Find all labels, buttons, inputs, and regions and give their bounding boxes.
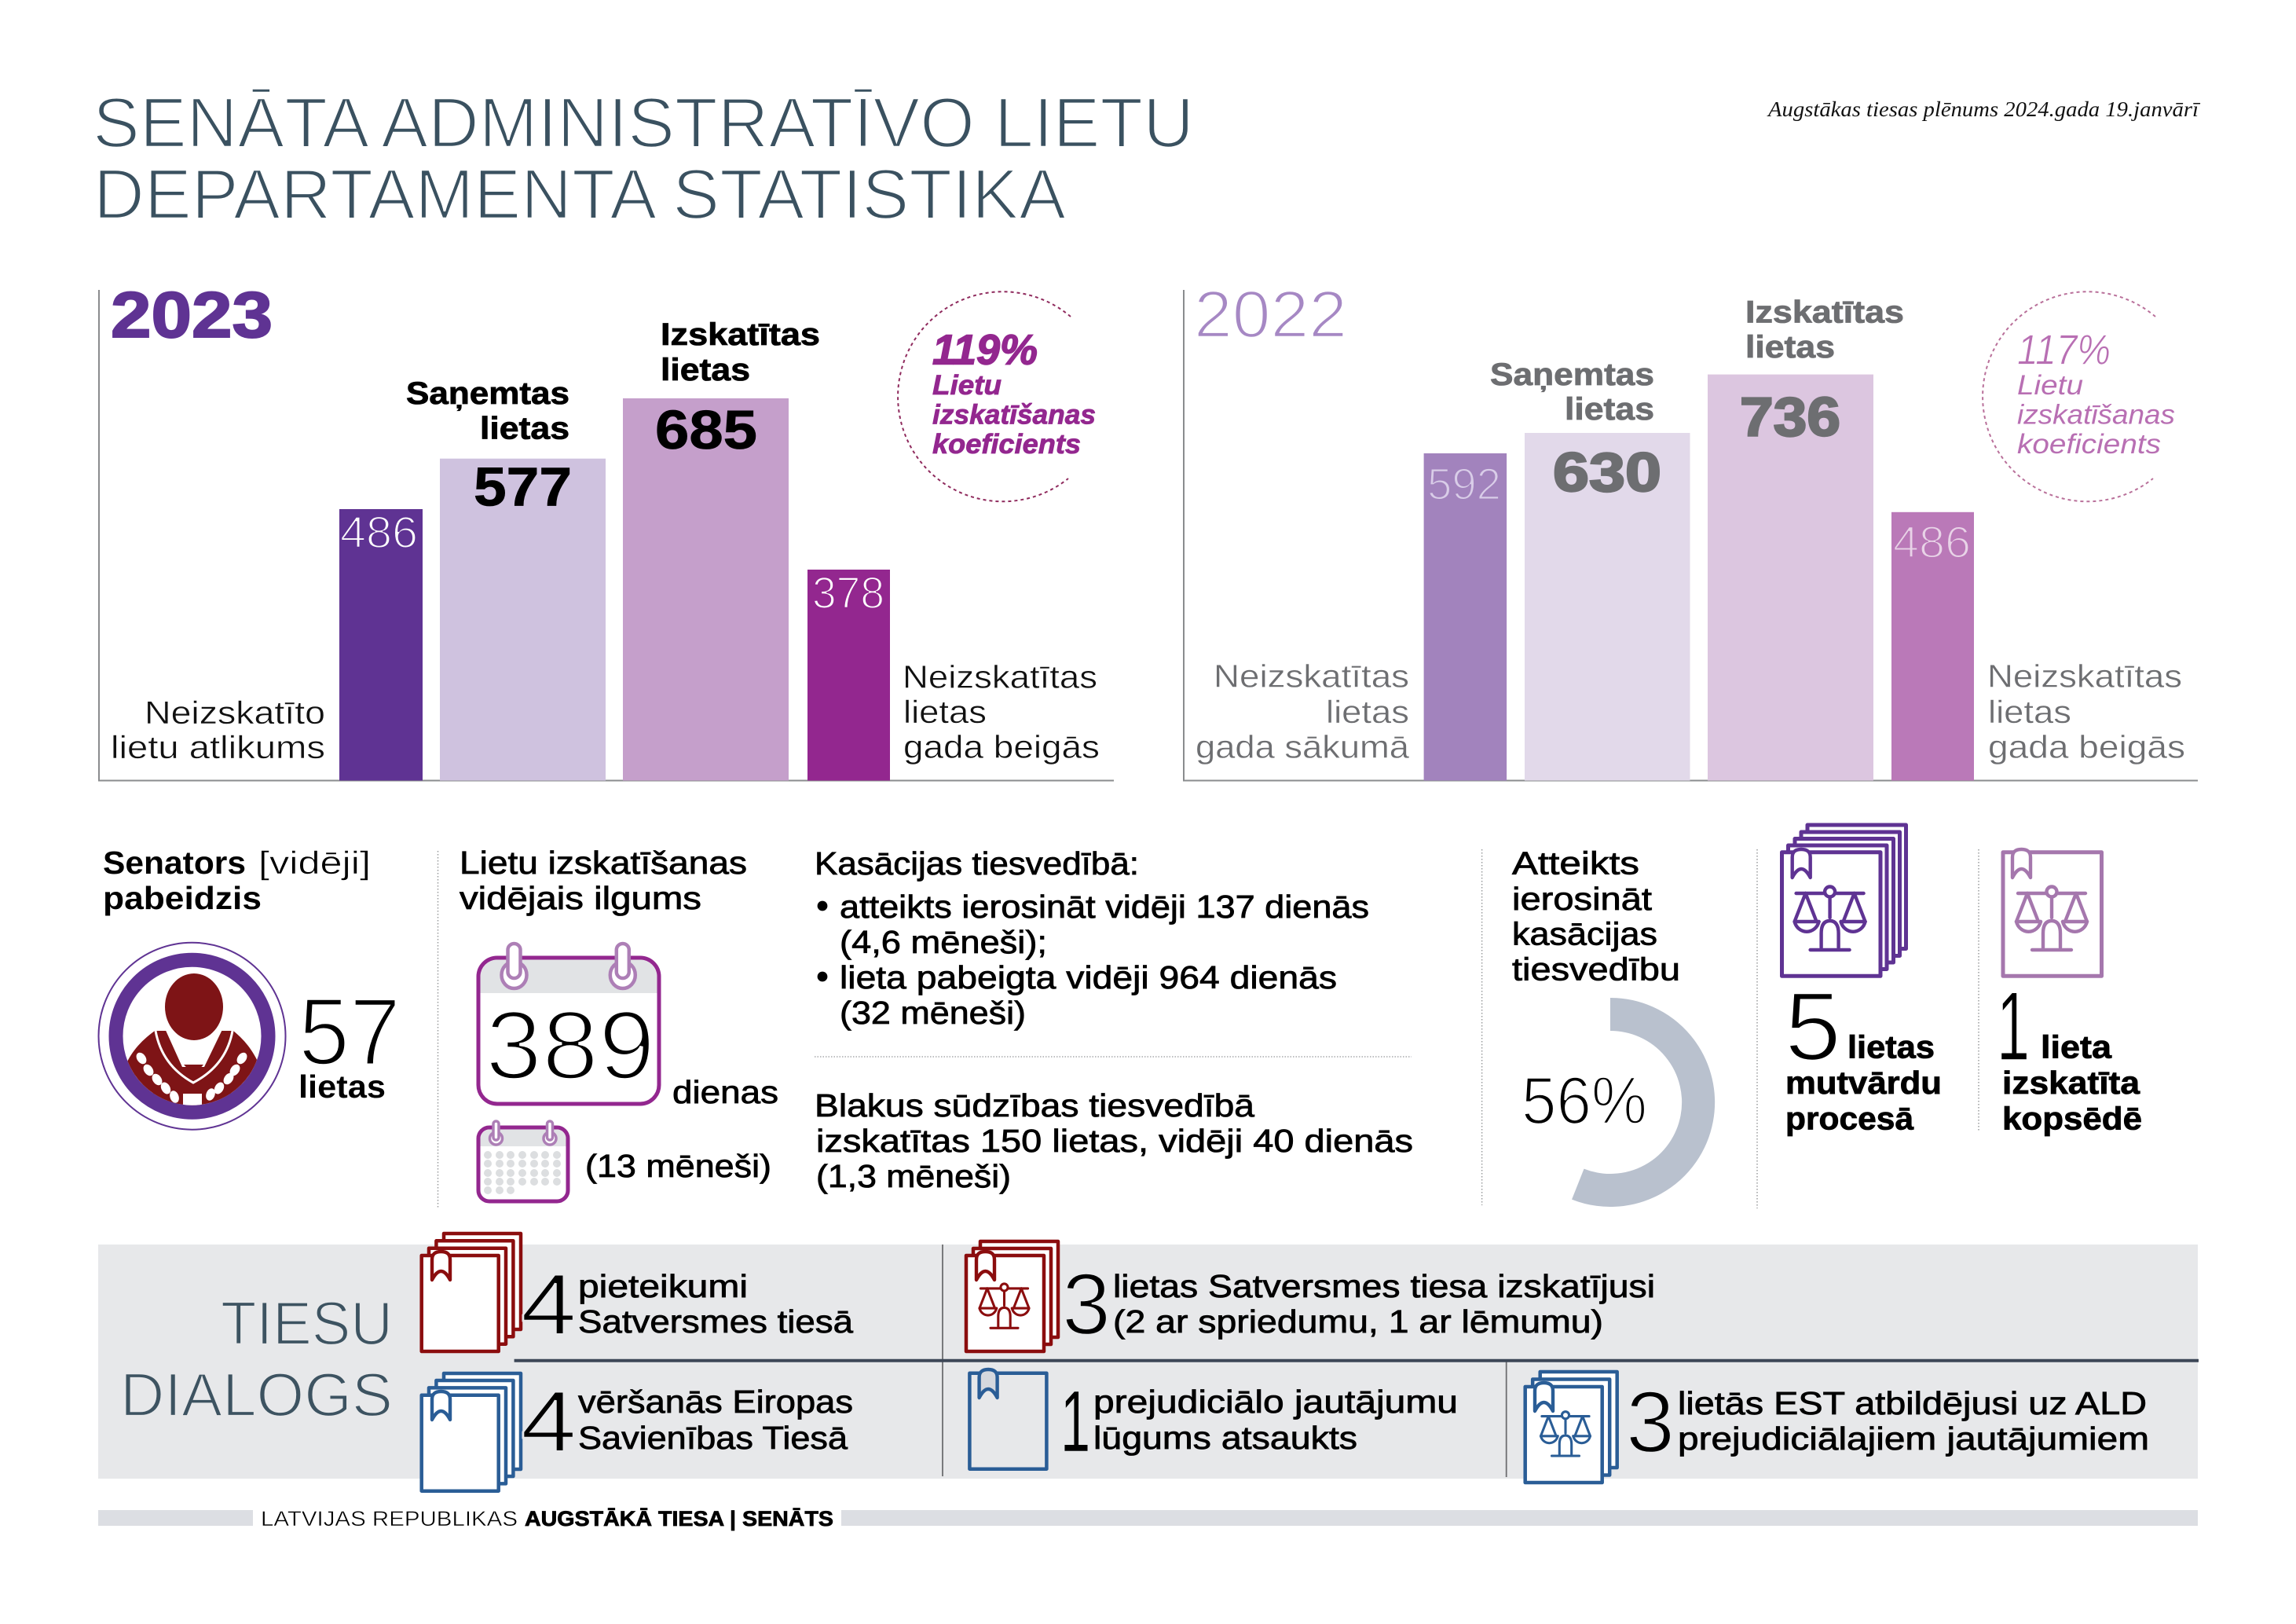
bar: 486: 486 (1893, 517, 1971, 567)
text: ancillary complaints: (1,3 mēneši) (816, 1158, 1011, 1194)
callout: 117% coefficient: koeficients (2017, 429, 2161, 460)
label: Neizskatītas lietas gada beigās: gada beigās (1988, 729, 2185, 765)
heading: duration: vidējais ilgums (460, 880, 701, 916)
heading: senator: pabeidzis (103, 880, 262, 916)
text: 3 lietās EST: lietās EST atbildējusi uz ALD (1678, 1385, 2147, 1421)
label: Izskatītas lietas (661, 317, 820, 387)
label: Neizskatīto lietu atlikums (111, 695, 325, 765)
number: 57 lietas: 57 (298, 978, 401, 1085)
panel: average duration (460, 845, 778, 1201)
bar: 486 (1891, 512, 1974, 781)
text: 1 lieta izskatīta kopsēdē: izskatīta (2002, 1065, 2140, 1101)
text: 1 lieta izskatīta kopsēdē: 1 (1997, 973, 2030, 1081)
chart: 56% donut: 56% (1522, 1064, 1647, 1138)
text: 4 vēršanās: vēršanās Eiropas (578, 1384, 853, 1420)
panel: 2023 chart (99, 278, 1114, 781)
heading: refused cassation: ierosināt (1512, 881, 1653, 917)
footer: AUGSTĀKĀ TIESA | SENĀTS (525, 1507, 833, 1531)
icon: five documents with scales (1782, 825, 1906, 976)
label: Izskatītas lietas: lietas (1745, 330, 1835, 365)
year 2023: 2023 (111, 278, 273, 351)
heading: senator: Senators (103, 845, 246, 881)
text: 4 vēršanās: 4 (521, 1373, 577, 1470)
bar: 577 (440, 456, 606, 781)
icon: blue stack (422, 1373, 521, 1491)
label: Neizskatītas lietas gada beigās (903, 659, 1100, 765)
text: 1 lieta izskatīta kopsēdē: lieta (2041, 1029, 2112, 1065)
heading: refused cassation: tiesvedību (1512, 951, 1680, 988)
label: dienas: dienas (672, 1074, 778, 1110)
panel: tiesu dialogs (98, 1234, 2199, 1491)
icon: small calendar (478, 1121, 568, 1201)
label: Neizskatītas lietas gada beigās: lietas (1988, 694, 2071, 730)
icon: blue document (969, 1369, 1046, 1469)
label: Neizskatītas lietas gada beigās: Neizskatītas (1987, 658, 2182, 695)
bar: 486 (339, 508, 423, 781)
icon: blue stack with scales (1525, 1372, 1617, 1483)
text: 3 lietās EST: 3 (1626, 1374, 1675, 1471)
label: Neizskatītas lietas gada beigās: lietas (903, 694, 987, 730)
label: Izskatītas lietas: lietas (661, 353, 750, 387)
panel: oral hearings (1782, 825, 1942, 1137)
text: ancillary complaints: Blakus sūdzības tiesvedībā (815, 1087, 1254, 1124)
bar: 577: 577 (474, 456, 572, 517)
bar: 685: 685 (655, 399, 757, 460)
label: Neizskatītas lietas gada sākumā: Neizskatītas (1214, 658, 1409, 695)
icon: red stack (422, 1234, 521, 1351)
bar: 685 (623, 398, 789, 781)
text: 1 prejudiciālo: 1 (1060, 1373, 1090, 1470)
title (93, 84, 1194, 234)
number: 57 lietas: lietas (298, 1069, 386, 1105)
text: 3 lietās EST (1626, 1374, 2149, 1471)
label: 13 mēneši: (13 mēneši) (585, 1148, 771, 1184)
text: 3 lietās EST: prejudiciālajiem jautājumiem (1678, 1421, 2149, 1457)
bar: 736 (1708, 375, 1873, 781)
text: 1 prejudiciālo: lūgums atsaukts (1093, 1420, 1357, 1456)
text: 1 lieta izskatīta kopsēdē (1997, 973, 2142, 1137)
heading: tiesu dialogs (120, 1289, 393, 1429)
label: Neizskatīto lietu atlikums: Neizskatīto (145, 695, 325, 731)
footer (98, 1507, 2198, 1531)
label: Saņemtas lietas: Saņemtas (406, 376, 569, 411)
label: Saņemtas lietas: Saņemtas (1490, 357, 1654, 392)
text: 4 pieteikumi: 4 (521, 1256, 577, 1353)
panel: cassation text (815, 845, 1413, 1194)
bar: 592: 592 (1427, 460, 1501, 510)
title: SENĀTA ADMINISTRATĪVO LIETU (93, 84, 1194, 163)
text: 5 lietas mutvārdu procesā: 5 (1785, 973, 1841, 1081)
label: Izskatītas lietas (1745, 295, 1904, 365)
text: ancillary complaints: izskatītas 150 lietas, vidēji 40 dienās (816, 1123, 1413, 1159)
text: 4 pieteikumi: pieteikumi (578, 1268, 748, 1304)
divider (1482, 849, 1979, 1208)
text: 5 lietas mutvārdu procesā: procesā (1785, 1101, 1914, 1137)
divider (437, 851, 438, 1208)
callout: 117% coefficient: Lietu (2017, 370, 2083, 401)
heading: duration: Lietu izskatīšanas (460, 845, 747, 881)
label: Neizskatītas lietas gada beigās: Neizskatītas (903, 659, 1097, 695)
label: Neizskatītas lietas gada beigās (1987, 658, 2185, 765)
label: Neizskatīto lietu atlikums: lietu atlikums (111, 729, 325, 765)
text: 4 vēršanās (521, 1373, 853, 1470)
text: 5 lietas mutvārdu procesā: mutvārdu (1785, 1065, 1942, 1101)
heading: duration (460, 845, 747, 916)
text: cassation proceedings: Kasācijas tiesvedībā: (815, 845, 1139, 882)
text: 4 pieteikumi (521, 1256, 853, 1353)
heading: senator: [vidēji] (258, 845, 371, 881)
source note: Augstākas tiesas plēnums 2024.gada 19.janvārī (1767, 97, 2201, 121)
panel: senator (99, 845, 401, 1130)
label: Izskatītas lietas: Izskatītas (661, 317, 820, 352)
text: cassation proceedings (815, 845, 1369, 1031)
callout: 117% coefficient: izskatīšanas (2017, 399, 2175, 431)
heading: tiesu dialogs: TIESU (221, 1289, 393, 1358)
text: 5 lietas mutvārdu procesā (1785, 973, 1942, 1137)
callout: 119% coefficient: koeficients (932, 429, 1081, 460)
callout: 119% coefficient: Lietu (932, 370, 1002, 401)
text: 4 vēršanās: Savienības Tiesā (578, 1420, 848, 1456)
text: 4 pieteikumi: Satversmes tiesā (578, 1303, 853, 1340)
callout: 119% coefficient (898, 291, 1096, 501)
label: Neizskatītas lietas gada sākumā (1196, 658, 1409, 765)
text: 3 lietas Satversmes tiesa (1062, 1256, 1655, 1353)
callout: 117% coefficient: 117% (2017, 327, 2111, 374)
callout: 119% coefficient: izskatīšanas (932, 399, 1096, 431)
label: Neizskatītas lietas gada sākumā: lietas (1326, 694, 1409, 730)
heading: tiesu dialogs: DIALOGS (120, 1360, 393, 1429)
chart: 56% donut (1522, 1014, 1698, 1190)
icon: large calendar 389 (478, 944, 659, 1104)
heading: refused cassation (1512, 845, 1680, 988)
bar: 378: 378 (812, 568, 884, 618)
icon: one document with scales (2003, 849, 2102, 976)
heading: senator (103, 845, 371, 916)
text: 1 prejudiciālo: prejudiciālo jautājumu (1093, 1384, 1458, 1420)
text: cassation proceedings: (32 mēneši) (840, 995, 1026, 1031)
label: Izskatītas lietas: Izskatītas (1745, 295, 1904, 330)
label: Saņemtas lietas (406, 376, 569, 446)
icon: red stack with scales (966, 1241, 1058, 1351)
text: cassation proceedings: (4,6 mēneši); (840, 924, 1047, 960)
text: cassation proceedings: lieta pabeigta vidēji 964 dienās (840, 959, 1337, 995)
year 2022: 2022 (1194, 277, 1347, 351)
text: ancillary complaints (815, 1087, 1413, 1194)
heading: refused cassation: Atteikts (1512, 845, 1639, 881)
icon: senator in robe (99, 943, 286, 1130)
label: Saņemtas lietas: lietas (480, 412, 569, 446)
text: 1 prejudiciālo (1060, 1373, 1458, 1470)
callout: 119% coefficient: 119% (932, 327, 1038, 374)
text: 5 lietas mutvārdu procesā: lietas (1847, 1029, 1935, 1065)
panel: refused cassation (1512, 845, 1698, 1190)
title: DEPARTAMENTA STATISTIKA (93, 156, 1066, 234)
bar: 486: 486 (340, 508, 418, 558)
bar: 378 (807, 568, 890, 781)
panel: 2022 chart (1184, 277, 2198, 781)
bar: 592 (1424, 453, 1507, 781)
label: Neizskatītas lietas gada sākumā: gada sākumā (1196, 729, 1409, 765)
icon: large calendar 389: 389 (485, 992, 655, 1100)
text: 3 lietas Satversmes tiesa: 3 (1062, 1256, 1111, 1353)
text: cassation proceedings: atteikts ierosināt vidēji 137 dienās (840, 889, 1369, 925)
panel: closed session (1997, 849, 2142, 1137)
label: Neizskatītas lietas gada beigās: gada beigās (903, 729, 1100, 765)
footer: LATVIJAS REPUBLIKAS (261, 1507, 518, 1531)
callout: 117% coefficient (1983, 291, 2175, 501)
label: Saņemtas lietas (1490, 357, 1654, 427)
text: 3 lietas Satversmes tiesa: lietas Satversmes tiesa izskatījusi (1113, 1268, 1655, 1304)
bar: 630 (1525, 433, 1690, 781)
text: 3 lietas Satversmes tiesa: (2 ar spriedumu, 1 ar lēmumu) (1113, 1303, 1603, 1340)
heading: refused cassation: kasācijas (1512, 916, 1657, 952)
bar: 736: 736 (1740, 387, 1840, 448)
text: 1 lieta izskatīta kopsēdē: kopsēdē (2002, 1101, 2142, 1137)
label: Saņemtas lietas: lietas (1565, 392, 1654, 427)
bar: 630: 630 (1553, 442, 1661, 503)
